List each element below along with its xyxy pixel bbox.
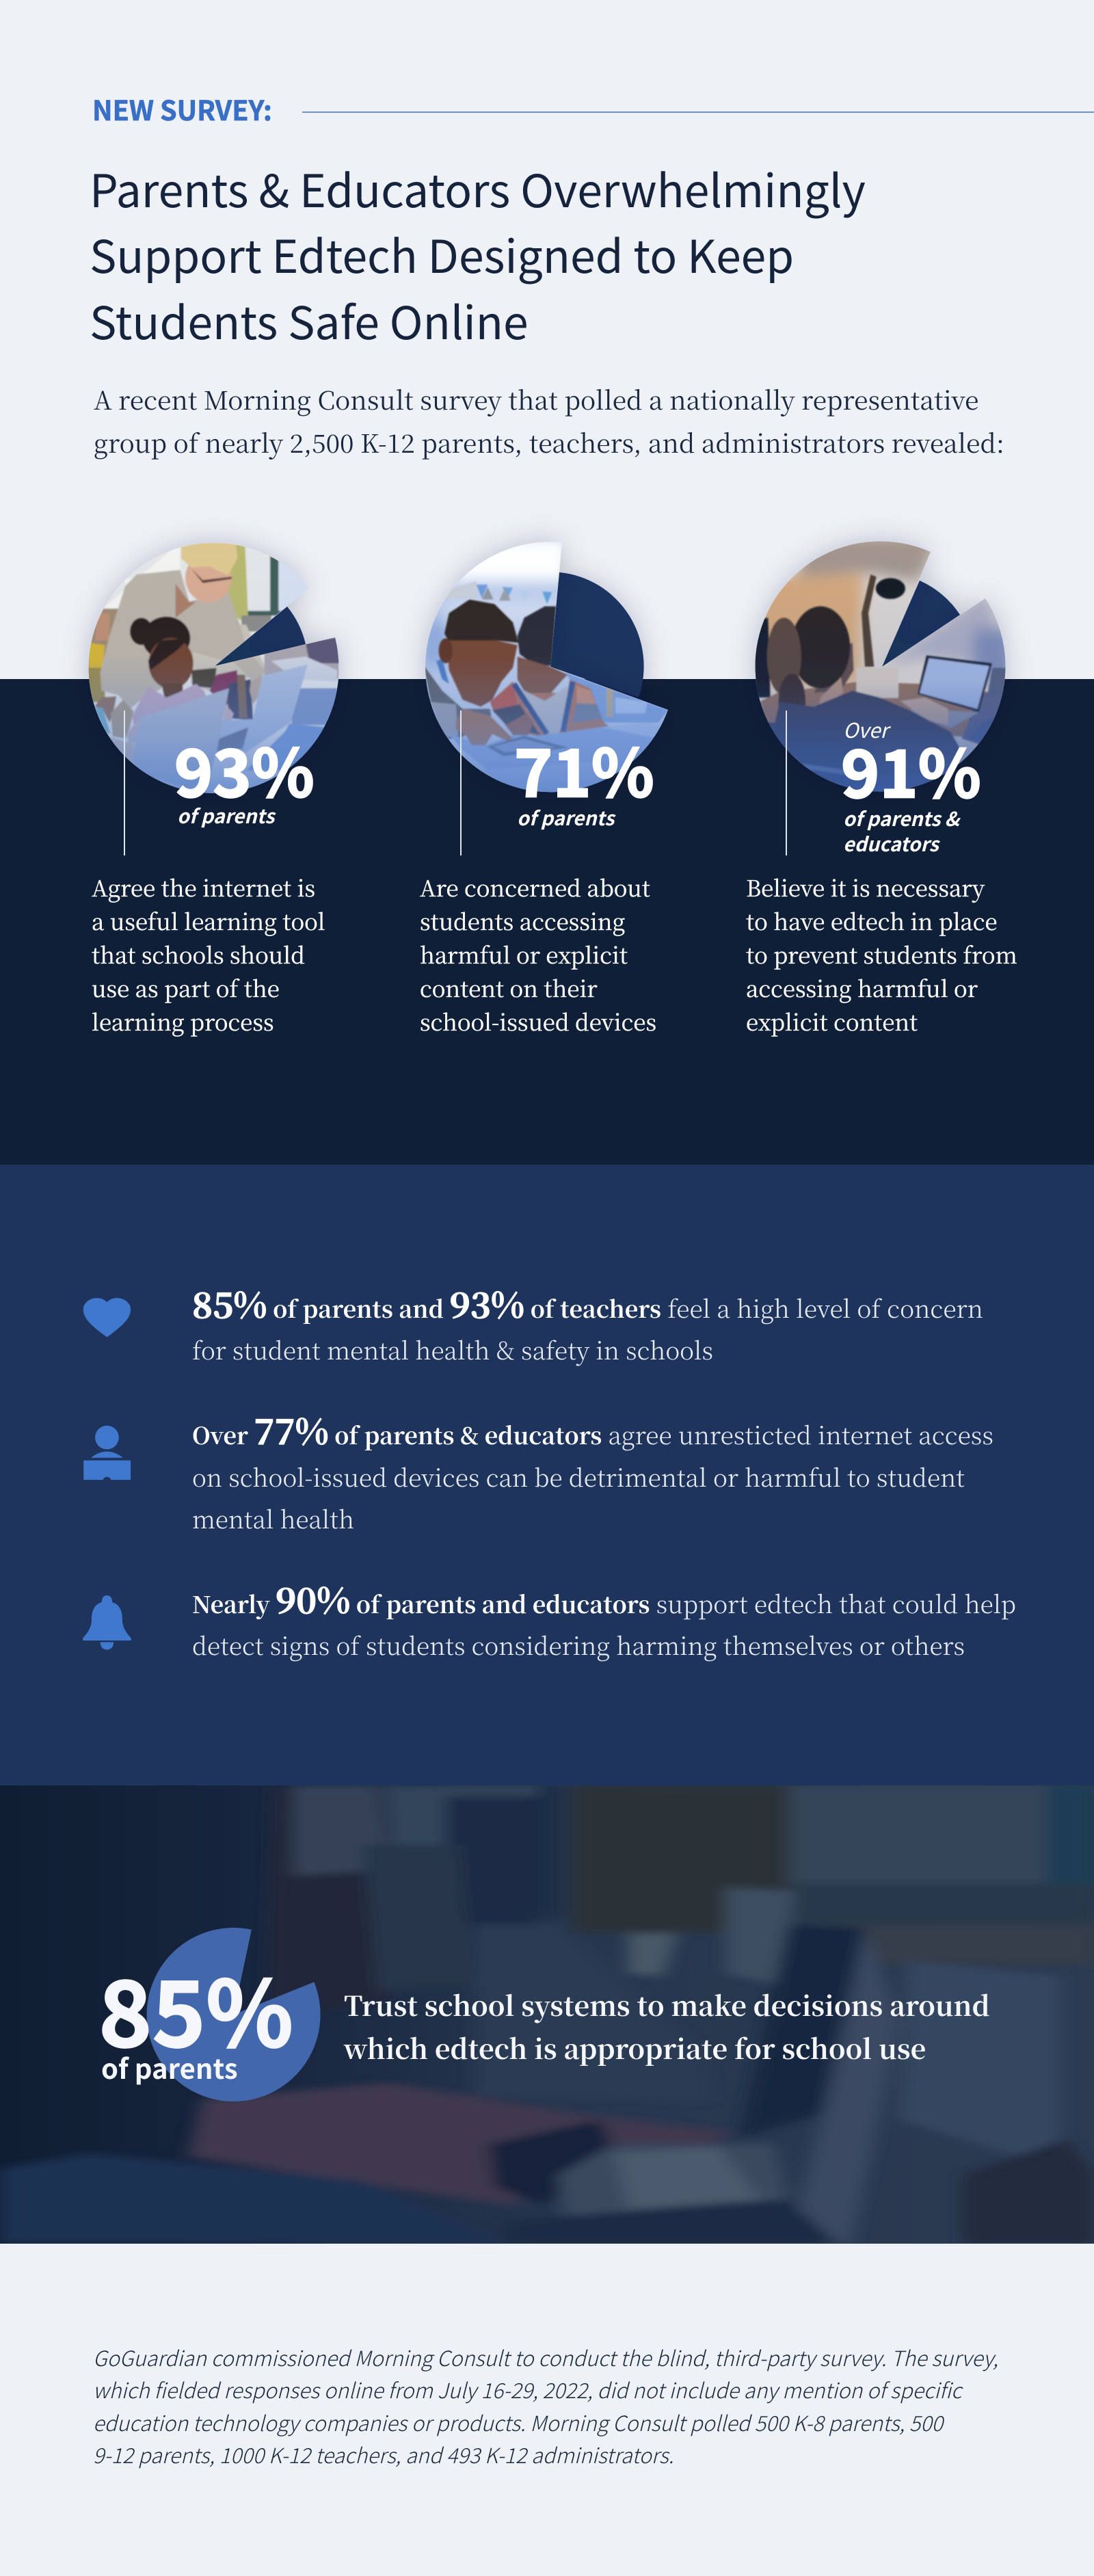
footnote: which fielded responses online from July 16-29, 2022, did not include any mention of specific: [93, 2374, 963, 2404]
stat: over 91% of parents & educators: 91%: [841, 721, 981, 816]
text: column 3: [746, 871, 1017, 1037]
footnote: GoGuardian commissioned Morning Consult to conduct the blind, third-party survey. The survey,: [93, 2342, 998, 2372]
finding: over 77% unrestricted access: on school-issued devices can be detrimental or harmful to student: [192, 1459, 965, 1494]
callout: trust school systems: [343, 1986, 990, 2067]
text: column 3: Believe it is necessary: [746, 871, 985, 903]
title: Students Safe Online: [90, 287, 529, 353]
leader line 1: [124, 711, 125, 855]
finding: over 77% unrestricted access: Over 77% of parents & educators agree unresticted internet access: [192, 1404, 993, 1455]
finding: nearly 90% support edtech: detect signs of students considering harming themselves or others: [192, 1628, 965, 1662]
title: Parents & Educators Overwhelmingly: [90, 155, 866, 221]
title: [90, 155, 866, 353]
text: column 2: harmful or explicit: [420, 938, 628, 970]
text: column 1: that schools should: [92, 938, 305, 970]
icon: heart: [83, 1298, 131, 1337]
text: column 2: students accessing: [420, 905, 625, 937]
chart: 91% pie with woman at laptop photo: [749, 535, 1012, 800]
photo slice: teacher and student: [82, 537, 342, 800]
text: column 3: accessing harmful or: [746, 972, 978, 1004]
finding: over 77% unrestricted access: mental health: [192, 1501, 354, 1536]
stat: over 91% of parents & educators: Over: [843, 714, 891, 744]
intro text: group of nearly 2,500 K-12 parents, teachers, and administrators revealed:: [94, 423, 1004, 460]
panel: classroom photo background: [0, 1785, 1094, 2244]
finding: over 77% unrestricted access: [192, 1404, 993, 1536]
text: column 1: use as part of the: [92, 972, 280, 1004]
text: column 3: to prevent students from: [746, 938, 1017, 970]
callout: trust school systems: which edtech is appropriate for school use: [343, 2029, 926, 2067]
text: column 3: to have edtech in place: [746, 905, 998, 937]
intro text: A recent Morning Consult survey that polled a nationally representative: [94, 380, 978, 417]
footnote: [93, 2342, 998, 2469]
leader line 2: [460, 711, 462, 855]
stat: over 91% of parents & educators: [841, 714, 981, 858]
stat: 71% of parents: of parents: [517, 804, 616, 832]
stat: 93% of parents: 93%: [174, 721, 315, 816]
stat: 85% of parents: 85%: [98, 1942, 293, 2073]
stat: over 91% of parents & educators: of parents &: [843, 804, 961, 832]
navy slice 71: [550, 572, 644, 698]
text: column 2: [420, 871, 656, 1037]
navy slice 93: [215, 607, 306, 666]
title: Support Edtech Designed to Keep: [90, 221, 794, 287]
footnote: 9-12 parents, 1000 K-12 teachers, and 493 K-12 administrators.: [93, 2439, 673, 2469]
stat: 71% of parents: 71%: [514, 721, 654, 816]
leader line 3: [786, 711, 787, 855]
text: column 2: content on their: [420, 972, 598, 1004]
text: column 2: school-issued devices: [420, 1005, 656, 1037]
panel: mental health findings: [0, 1165, 1094, 1785]
finding: 85% and 93% concern: [192, 1277, 983, 1367]
eyebrow: new survey: NEW SURVEY:: [92, 90, 272, 129]
finding: 85% and 93% concern: for student mental health & safety in schools: [192, 1332, 713, 1367]
photo slice: woman at laptop: [749, 535, 1012, 800]
chart: 71% pie with students photo: [421, 537, 680, 800]
icon: bell: [83, 1595, 131, 1649]
icon: student at desk: [83, 1426, 131, 1480]
text: column 1: [92, 871, 325, 1037]
finding: 85% and 93% concern: 85% of parents and 93% of teachers feel a high level of concern: [192, 1277, 983, 1328]
stat: over 91% of parents & educators: educators: [843, 829, 941, 858]
photo slice: two boys with tablet: [421, 537, 680, 800]
text: column 3: explicit content: [746, 1005, 918, 1037]
text: column 2: Are concerned about: [420, 871, 650, 903]
navy slice 91: [882, 581, 960, 667]
chart: 93% pie with teacher photo: [82, 537, 342, 800]
chart: 85% pie: [147, 1928, 321, 2101]
text: column 1: learning process: [92, 1005, 274, 1037]
finding: nearly 90% support edtech: Nearly 90% of parents and educators support edtech that could help: [192, 1573, 1016, 1623]
finding: nearly 90% support edtech: [192, 1573, 1016, 1662]
panel: dark statistics band: [0, 679, 1094, 1165]
footnote: education technology companies or products. Morning Consult polled 500 K-8 parents, 500: [93, 2407, 946, 2437]
intro text: [94, 380, 1004, 460]
text: column 1: Agree the internet is: [92, 871, 315, 903]
stat: 85% of parents: of parents: [101, 2047, 238, 2087]
text: column 1: a useful learning tool: [92, 905, 325, 937]
callout: trust school systems: Trust school systems to make decisions around: [344, 1986, 990, 2024]
stat: 93% of parents: of parents: [177, 801, 276, 829]
